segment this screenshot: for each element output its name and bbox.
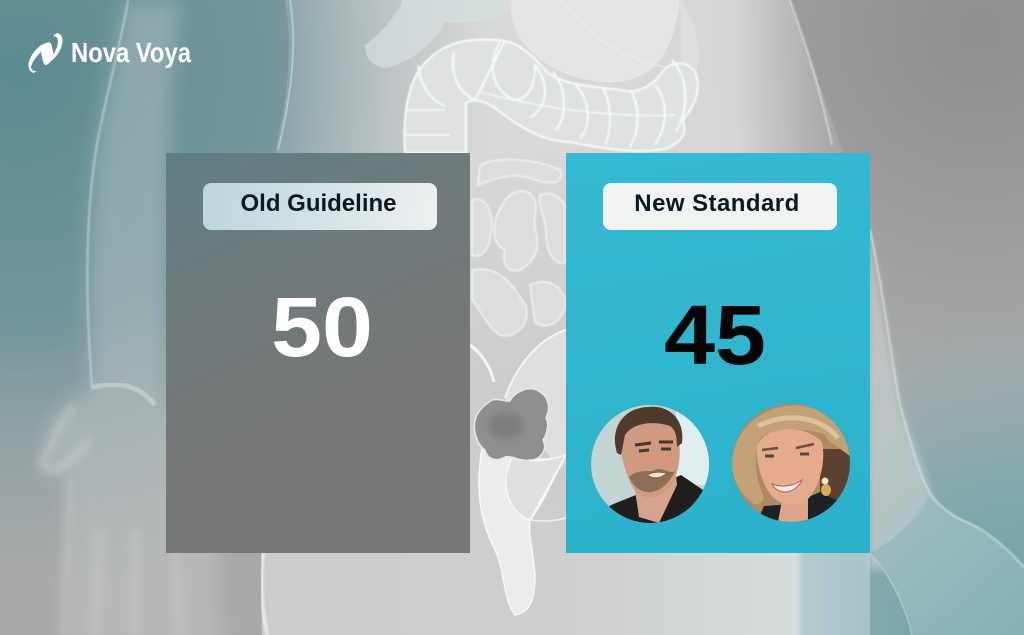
old age number: 50 — [271, 280, 372, 374]
tumor — [474, 389, 548, 460]
portrait: woman — [732, 404, 850, 522]
panel: old guideline — [166, 153, 470, 553]
panel: new standard — [566, 153, 870, 553]
portrait: man — [591, 405, 709, 523]
small intestine — [470, 153, 566, 553]
stomach and liver — [365, 0, 698, 82]
new standard label: New Standard — [634, 190, 800, 217]
logo — [28, 33, 192, 73]
new age number: 45 — [664, 288, 766, 382]
large intestine — [404, 40, 698, 153]
left arm and hand — [40, 0, 220, 635]
torso — [262, 0, 870, 635]
old guideline label — [203, 183, 437, 230]
new standard label — [603, 183, 837, 230]
rectum — [479, 330, 566, 615]
old guideline label: Old Guideline — [240, 190, 396, 217]
right arm and hand — [790, 0, 1024, 635]
icon: swoosh mark — [28, 33, 63, 73]
logo wordmark: Nova Voya — [71, 37, 191, 68]
